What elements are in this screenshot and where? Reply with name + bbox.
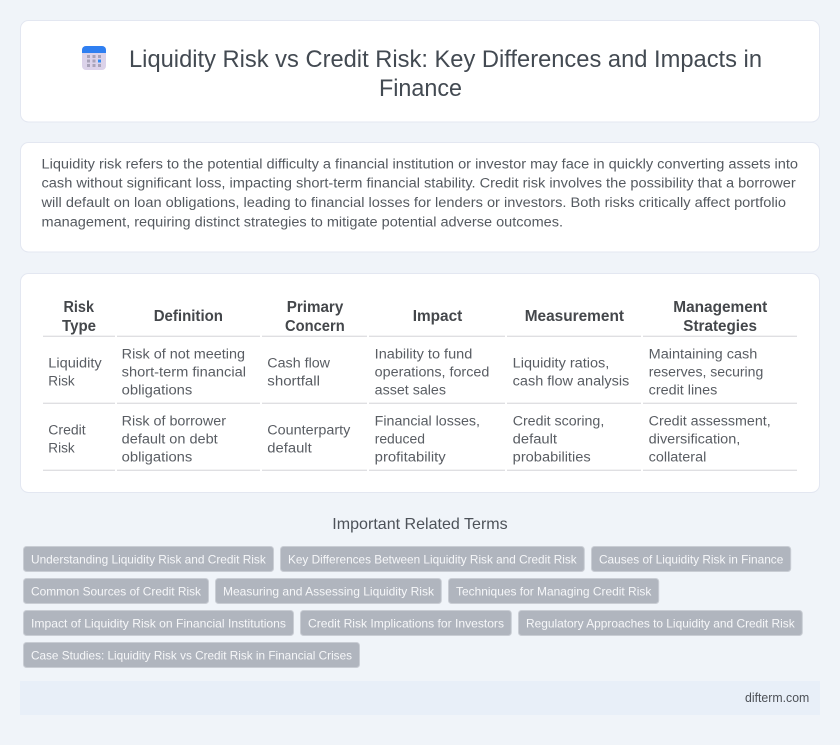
table row: liquidity risk: cash flow analysis <box>513 373 629 389</box>
table row: liquidity risk: Cash flow <box>267 355 331 371</box>
table header row: Definition <box>154 308 223 325</box>
table row: liquidity risk: Maintaining cash <box>649 346 757 362</box>
table row: credit risk: Risk of borrower <box>122 413 226 429</box>
tag group: related terms: Case Studies: Liquidity Risk vs Credit Risk in Financial Crises <box>31 648 352 662</box>
table header row: Management <box>673 299 768 316</box>
table header row: Strategies <box>683 318 757 335</box>
text block: introduction paragraph: cash without significant loss, impacting short-term financial stability. Credit risk involves the possibility that a borrower <box>42 176 796 192</box>
tag group: related terms: Techniques for Managing Credit Risk <box>456 584 651 598</box>
table row: credit risk: default <box>267 440 312 456</box>
table row: credit risk: collateral <box>649 449 706 465</box>
tag group: related terms: Key Differences Between Liquidity Risk and Credit Risk <box>288 552 577 566</box>
table header row: Primary <box>287 299 344 316</box>
text block: introduction paragraph <box>40 156 798 230</box>
table row: credit risk: probabilities <box>513 449 591 465</box>
tag group: related terms: Credit Risk Implications for Investors <box>308 616 504 630</box>
panel: comparison table <box>20 274 820 492</box>
table header row: Risk <box>64 299 94 316</box>
footer <box>20 681 820 715</box>
text block: introduction paragraph: will default on loan obligations, leading to financial losses for lenders or investors. Both risks critically affect portfolio <box>40 195 786 211</box>
tag group: related terms <box>24 546 802 668</box>
icon: calendar <box>82 46 106 70</box>
table row: credit risk: obligations <box>122 449 192 465</box>
footer: difterm.com <box>745 690 809 705</box>
table row: credit risk: Credit assessment, <box>649 413 771 429</box>
section: important related terms <box>24 516 802 668</box>
table row: credit risk: default <box>513 431 557 447</box>
tag group: related terms: Causes of Liquidity Risk in Finance <box>599 552 784 566</box>
table row: liquidity risk: asset sales <box>375 382 446 398</box>
table row: liquidity risk: credit lines <box>649 382 717 398</box>
table row: liquidity risk: short-term financial <box>122 364 246 380</box>
table row: liquidity risk: Risk of not meeting <box>122 346 245 362</box>
title <box>129 46 762 102</box>
table row: liquidity risk: operations, forced <box>375 364 489 380</box>
table row: liquidity risk: Liquidity ratios, <box>513 355 609 371</box>
table header row: Measurement <box>525 308 625 325</box>
table row: liquidity risk <box>48 346 763 398</box>
table row: liquidity risk: shortfall <box>267 373 320 389</box>
table row: credit risk: Risk <box>48 440 76 456</box>
table row: liquidity risk: Risk <box>48 373 76 389</box>
table header row: Concern <box>285 318 345 335</box>
table row: credit risk <box>48 413 771 465</box>
table header row: Type <box>62 318 96 335</box>
table header row <box>62 299 768 335</box>
table row: credit risk: Credit <box>48 422 86 438</box>
table row: credit risk: diversification, <box>649 431 740 447</box>
tag group: related terms: Common Sources of Credit Risk <box>31 584 201 598</box>
table row: credit risk: Counterparty <box>267 422 351 438</box>
table row: liquidity risk: reserves, securing <box>649 364 763 380</box>
text block: introduction paragraph: Liquidity risk refers to the potential difficulty a financial institution or investor may face in quickly converting assets into <box>42 156 798 172</box>
table row: credit risk: profitability <box>375 449 447 465</box>
table row: credit risk: reduced <box>375 431 425 447</box>
title: Liquidity Risk vs Credit Risk: Key Differences and Impacts in <box>129 46 762 73</box>
table header row: Impact <box>413 308 463 325</box>
table row: liquidity risk: Liquidity <box>48 355 103 371</box>
tag group: related terms: Understanding Liquidity Risk and Credit Risk <box>31 552 266 566</box>
table row: liquidity risk: Inability to fund <box>375 346 472 362</box>
tag group: related terms: Impact of Liquidity Risk on Financial Institutions <box>31 616 286 630</box>
table row: credit risk: Credit scoring, <box>513 413 604 429</box>
table row: credit risk: default on debt <box>122 431 218 447</box>
title: Finance <box>379 75 462 102</box>
tag group: related terms: Regulatory Approaches to Liquidity and Credit Risk <box>526 616 795 630</box>
text block: introduction paragraph: management, requiring distinct strategies to mitigate potential adverse outcomes. <box>42 214 563 230</box>
table row: credit risk: Financial losses, <box>375 413 480 429</box>
panel: introduction <box>20 142 820 252</box>
heading: important related terms: Important Related Terms <box>332 516 508 533</box>
panel: header <box>20 20 820 122</box>
table row: liquidity risk: obligations <box>122 382 192 398</box>
tag group: related terms: Measuring and Assessing Liquidity Risk <box>223 584 434 598</box>
